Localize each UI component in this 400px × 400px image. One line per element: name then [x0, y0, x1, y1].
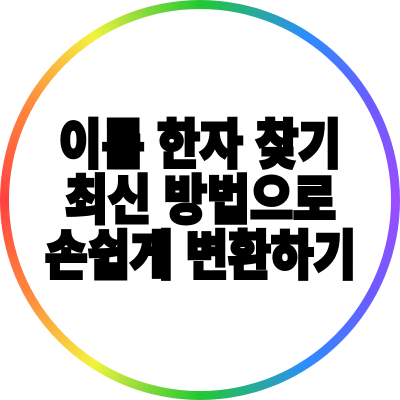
title line 2: 최신 방법으로 [65, 172, 336, 230]
title line 1: 이름 한자 찾기 [59, 116, 341, 175]
title line 3: 손쉽게 변환하기 [45, 227, 356, 286]
